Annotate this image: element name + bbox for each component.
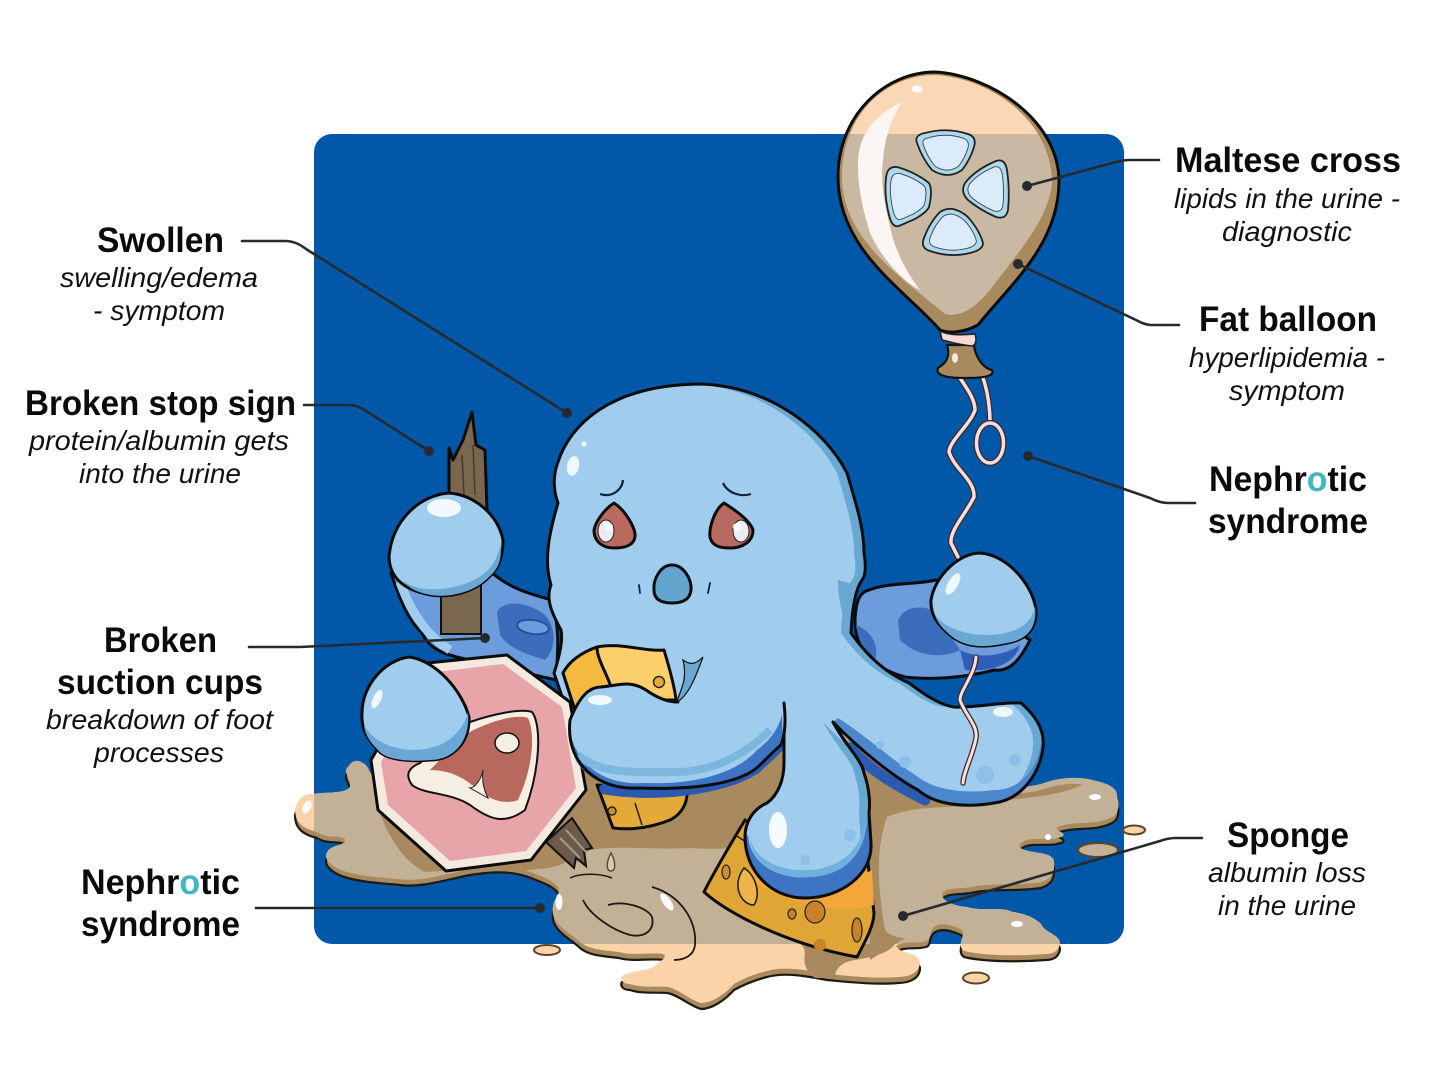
label: broken stop sign: protein/albumin gets — [28, 425, 289, 456]
label: nephrotic syndrome left — [81, 863, 240, 944]
label: sponge: Sponge — [1227, 816, 1349, 855]
nose — [654, 565, 691, 603]
illustration: lower cheese piece — [597, 785, 687, 829]
leader: broken stop sign — [304, 405, 434, 456]
label: nephrotic syndrome left: Nephrotic — [81, 863, 240, 902]
label: maltese cross: diagnostic — [1222, 216, 1352, 247]
label: nephrotic syndrome right — [1208, 460, 1368, 541]
label: broken suction cups: breakdown of foot — [46, 704, 274, 735]
label: sponge — [1208, 816, 1366, 921]
leader: fat balloon — [1013, 259, 1179, 325]
leader: nephrotic syndrome left — [256, 903, 545, 913]
label: broken suction cups: processes — [93, 737, 224, 768]
label: swollen — [60, 221, 258, 326]
illustration: octopus face — [594, 480, 753, 603]
label: nephrotic syndrome left: syndrome — [81, 905, 240, 944]
illustration: upper-left mitten — [389, 493, 503, 596]
illustration: tentacle fringe — [605, 735, 925, 800]
illustration: cheese in hand — [563, 646, 703, 710]
label: broken stop sign — [25, 384, 296, 489]
label: broken stop sign: into the urine — [79, 458, 241, 489]
balloon highlight — [858, 102, 920, 290]
balloon neck — [937, 345, 993, 378]
label: broken suction cups: Broken — [104, 621, 217, 660]
illustration: right mitten — [931, 553, 1036, 646]
neck notch shade — [838, 580, 850, 614]
leader: nephrotic syndrome right — [1023, 451, 1195, 503]
label: swollen: swelling/edema — [60, 262, 258, 293]
left eye — [594, 503, 635, 548]
illustration: puddle — [294, 734, 1146, 1010]
label: swollen: - symptom — [93, 295, 225, 326]
label: broken stop sign: Broken stop sign — [25, 384, 296, 423]
label: swollen: Swollen — [97, 221, 224, 260]
small drops — [534, 945, 560, 955]
illustration: big sponge cheese — [704, 820, 874, 957]
label: sponge: albumin loss — [1208, 857, 1366, 888]
label: fat balloon — [1189, 300, 1385, 406]
label: broken suction cups — [46, 621, 274, 768]
steak — [408, 711, 538, 819]
drip drop — [607, 853, 615, 871]
label: maltese cross — [1174, 141, 1401, 247]
brows — [600, 480, 623, 495]
maltese cross petals — [885, 130, 1009, 255]
label: sponge: in the urine — [1218, 890, 1356, 921]
label: fat balloon: Fat balloon — [1199, 300, 1377, 339]
leader: swollen — [242, 241, 572, 418]
bubbles — [800, 741, 1021, 865]
leader: broken suction cups — [249, 633, 490, 647]
background panel — [314, 134, 1124, 944]
illustration: fat balloon — [836, 70, 1060, 380]
right eye — [710, 503, 753, 548]
label: maltese cross: lipids in the urine - — [1174, 183, 1400, 214]
label: fat balloon: symptom — [1229, 375, 1345, 406]
label: nephrotic syndrome right: syndrome — [1208, 502, 1368, 541]
highlights — [565, 455, 581, 477]
illustration: broken stick top — [449, 412, 487, 510]
hand shading — [833, 718, 1043, 805]
illustration: broken stop sign — [371, 655, 586, 871]
illustration: left arm with broken suction cups — [391, 570, 558, 680]
label: broken suction cups: suction cups — [57, 663, 263, 702]
illustration: lower-left mitten — [362, 657, 469, 761]
illustration: balloon string — [949, 378, 1004, 783]
puddle ripple — [583, 900, 653, 936]
label: maltese cross: Maltese cross — [1175, 141, 1401, 180]
foot shading — [745, 815, 873, 898]
illustration: front arm — [570, 684, 785, 788]
leader: sponge — [898, 838, 1202, 921]
illustration: right arm with broken suction cups — [855, 580, 1030, 678]
illustration: broken stick bottom — [546, 818, 592, 868]
label: nephrotic syndrome right: Nephrotic — [1209, 460, 1367, 499]
leader: maltese cross — [1022, 160, 1159, 191]
label: fat balloon: hyperlipidemia - — [1189, 342, 1385, 373]
illustration: octopus body — [537, 384, 1043, 898]
